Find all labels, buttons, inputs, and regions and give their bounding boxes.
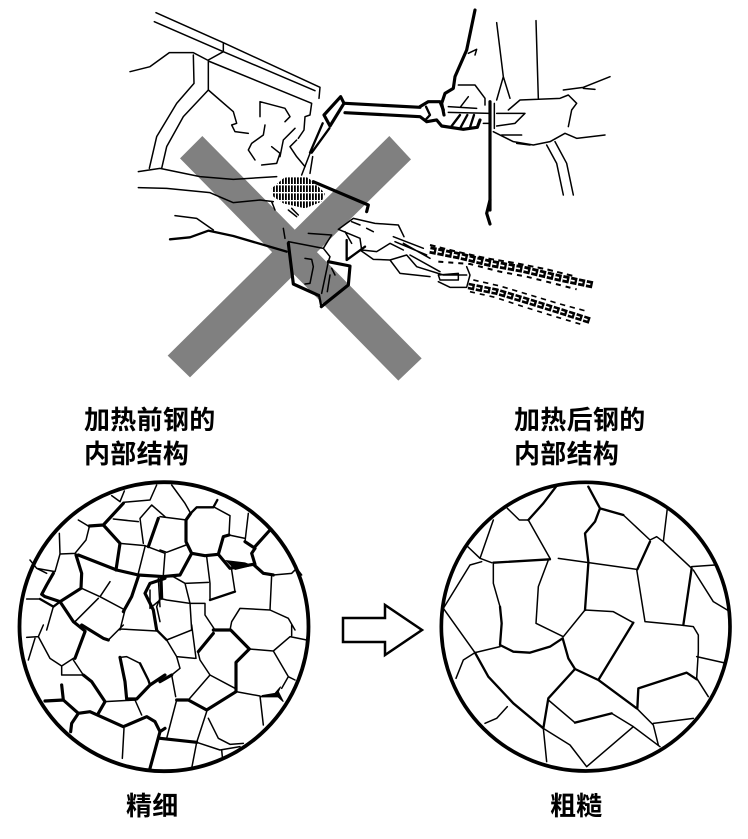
illustration: torch heating a bracket with chains, crossed out — [130, 10, 610, 381]
arrow: fine to coarse — [343, 605, 422, 655]
grain boundaries: top right — [157, 485, 302, 630]
welding torch and gloved hand — [310, 10, 610, 210]
vehicle body panel — [130, 13, 320, 252]
heading: after heating: 加热后钢的 — [514, 405, 646, 435]
heading: before heating: 内部结构 — [84, 439, 189, 469]
icon: grey prohibition cross — [168, 136, 422, 381]
grain boundaries: bottom right — [157, 625, 307, 768]
chart: coarse grain structure circle — [441, 482, 730, 771]
label: fine: 精细 — [126, 791, 179, 821]
heated zone hatching — [270, 181, 368, 217]
grain boundaries: bottom left — [27, 625, 165, 768]
label: coarse: 粗糙 — [550, 791, 603, 821]
grain boundaries: top left — [27, 485, 165, 631]
steel bracket — [283, 228, 365, 307]
heading: after heating: 内部结构 — [514, 439, 619, 469]
chain hook and two chains — [338, 200, 593, 325]
chart: fine grain structure circle — [20, 482, 308, 771]
heading: before heating: 加热前钢的 — [84, 405, 216, 435]
